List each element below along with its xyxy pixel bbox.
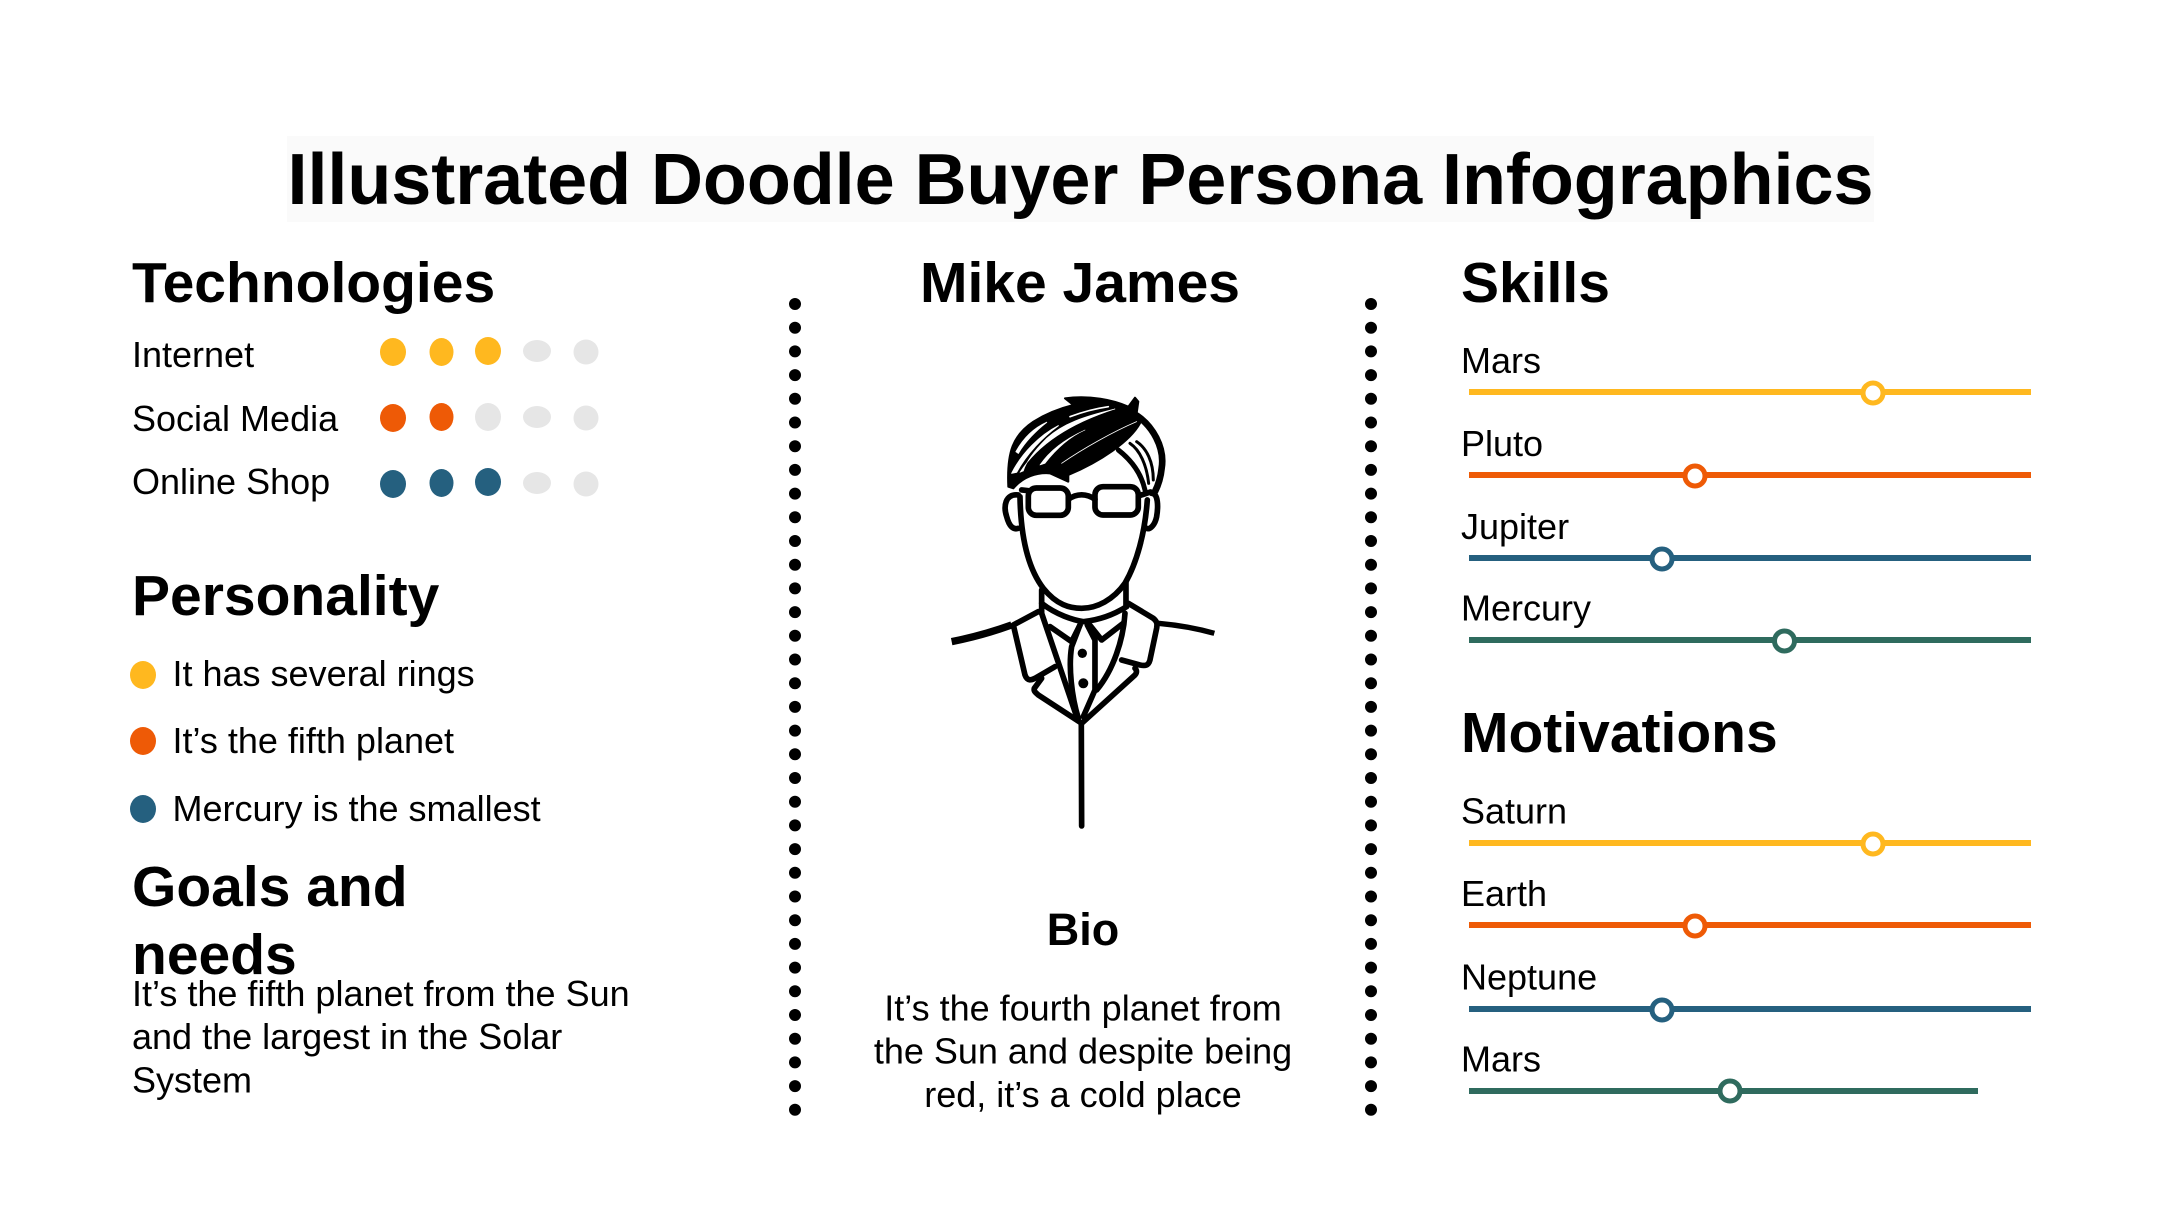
heading: motivations: Motivations <box>1461 701 1778 765</box>
panel: persona <box>874 251 1292 1115</box>
slider: mars: Mars <box>1461 1038 1541 1080</box>
heading: technologies: Technologies <box>132 251 495 315</box>
text: goals body: and the largest in the Solar <box>132 1016 562 1057</box>
rating: social media <box>132 398 598 439</box>
heading: personality: Personality <box>132 564 440 628</box>
slider: saturn <box>1461 790 2031 854</box>
panel: technologies <box>132 251 598 502</box>
text: bio body: It’s the fourth planet from <box>884 988 1282 1028</box>
panel: motivations <box>1461 701 2031 1101</box>
slider: mars: Mars <box>1461 340 1541 381</box>
slider: earth: Earth <box>1461 873 1547 914</box>
slider: mars <box>1461 1038 1978 1101</box>
slider: pluto <box>1461 423 2031 486</box>
rating: internet <box>132 334 598 375</box>
rating: online shop <box>132 461 598 502</box>
slider: mercury: Mercury <box>1461 588 1591 628</box>
slider: saturn: Saturn <box>1461 790 1567 832</box>
bullet: smallest: Mercury is the smallest <box>172 788 541 829</box>
rating: online shop: Online Shop <box>132 461 330 502</box>
slider: earth <box>1461 873 2031 936</box>
text: goals body: System <box>132 1060 252 1100</box>
slider: neptune: Neptune <box>1461 956 1597 998</box>
text: goals body: It’s the fifth planet from the Sun <box>132 973 630 1014</box>
panel: goals and needs <box>132 855 630 1100</box>
panel: skills <box>1461 251 2031 651</box>
heading: goals and needs: Goals and <box>132 855 408 919</box>
bullet: fifth planet: It’s the fifth planet <box>172 720 454 761</box>
bullet: rings: It has several rings <box>172 653 475 694</box>
title: Illustrated Doodle Buyer Persona Infographics <box>288 140 1874 220</box>
text: bio body: the Sun and despite being <box>874 1030 1292 1072</box>
slider: mars <box>1461 340 2031 403</box>
text: bio body: red, it’s a cold place <box>924 1074 1242 1115</box>
slider: jupiter: Jupiter <box>1461 506 1569 547</box>
slider: pluto: Pluto <box>1461 423 1543 464</box>
rating: internet: Internet <box>132 334 254 375</box>
heading: name: Mike James <box>920 251 1240 315</box>
slider: jupiter <box>1461 506 2031 569</box>
panel: personality <box>130 564 541 829</box>
illustration: man with glasses <box>952 397 1214 826</box>
slider: neptune <box>1461 956 2031 1020</box>
heading: goals and needs: needs <box>132 923 297 987</box>
heading: skills: Skills <box>1461 251 1610 315</box>
heading: bio: Bio <box>1047 904 1119 955</box>
slider: mercury <box>1461 588 2031 651</box>
rating: social media: Social Media <box>132 398 339 439</box>
